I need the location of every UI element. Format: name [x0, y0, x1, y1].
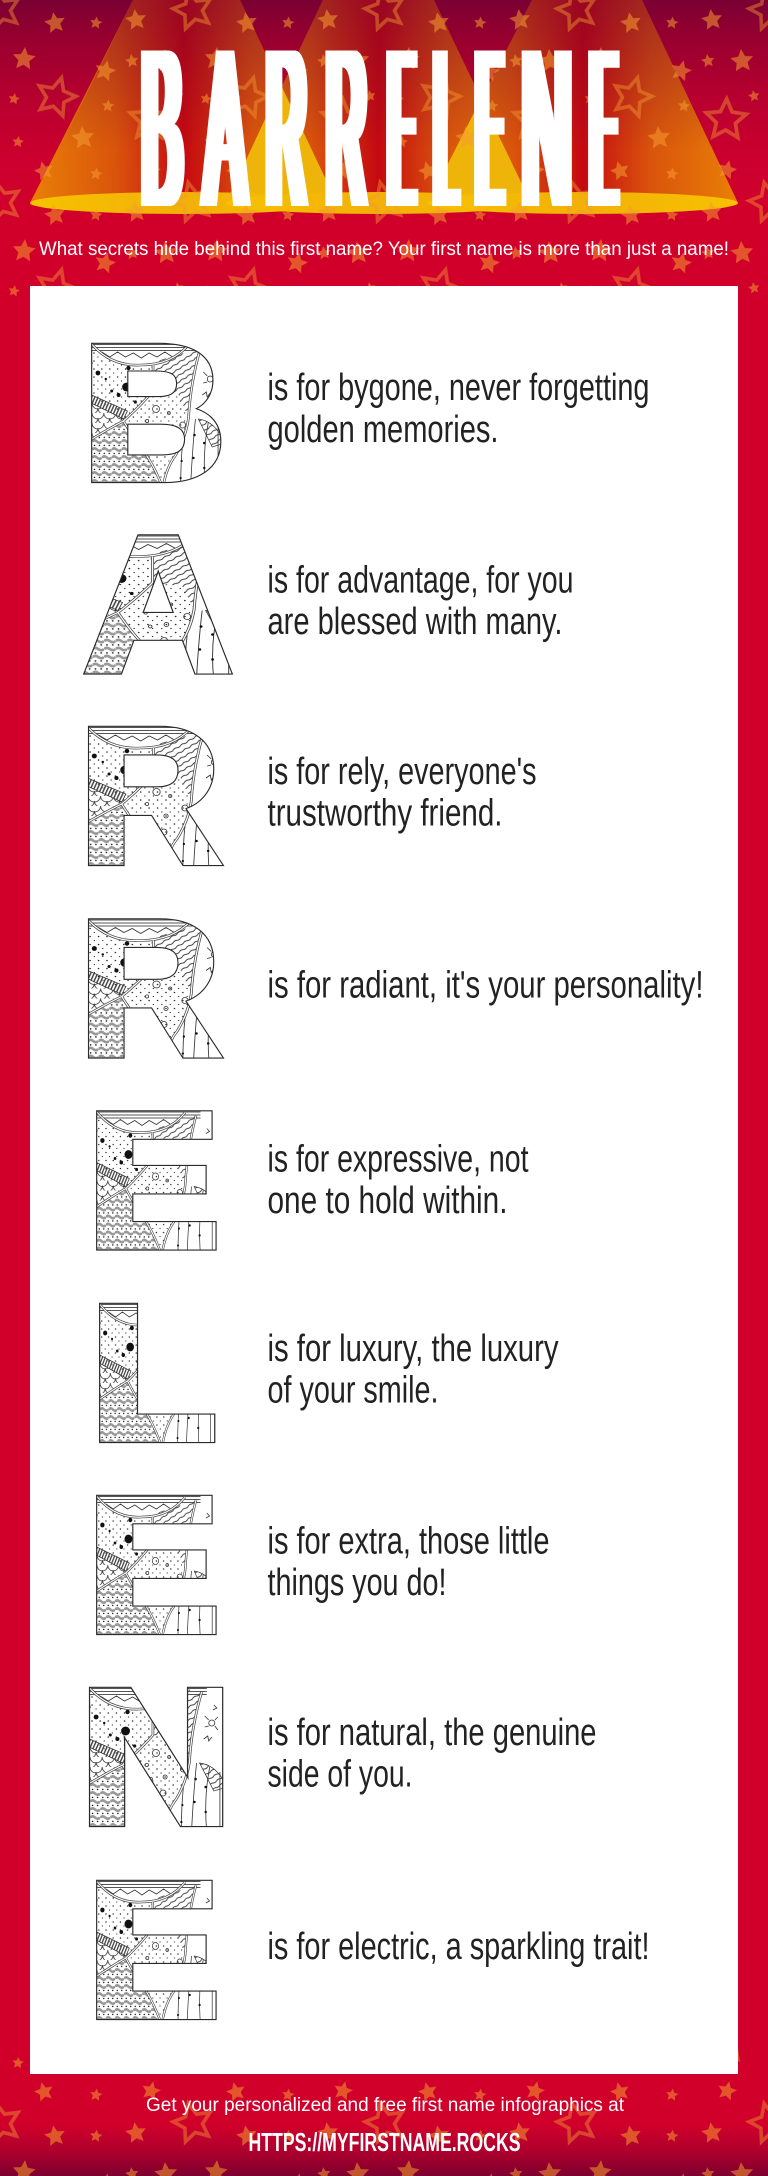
icon: doodle letter L [99, 1302, 216, 1444]
text: L line [268, 1328, 558, 1412]
icon: doodle letter A [82, 534, 234, 675]
icon: doodle letter R: R [79, 689, 221, 904]
icon: doodle letter E: E [87, 1843, 220, 2057]
title: A [205, 1, 245, 254]
title: L [435, 1, 456, 254]
icon: doodle letter E [96, 1880, 217, 2020]
icon: doodle letter E: E [87, 1458, 220, 1672]
subtitle: What secrets hide behind this first name? Your first name is more than just a name! [39, 238, 729, 260]
row: letter R [79, 882, 704, 1096]
text: A line [268, 559, 574, 643]
title: E [591, 1, 616, 254]
icon: doodle letter B [91, 342, 222, 484]
row: letter R [79, 689, 536, 904]
text: R line: is for rely, everyone's [268, 751, 536, 793]
spotlight cones [30, 0, 738, 214]
text: R line: trustworthy friend. [268, 792, 502, 834]
row: letter E [87, 1073, 529, 1288]
text: B line: is for bygone, never forgetting [268, 367, 650, 409]
row: letter B [82, 306, 650, 520]
footer url: HTTPS://MYFIRSTNAME.ROCKS [248, 2127, 520, 2157]
title: R [327, 1, 365, 254]
text: E line [268, 1138, 529, 1222]
text: E line: one to hold within. [268, 1180, 508, 1222]
text: N line [268, 1712, 596, 1796]
title [140, 1, 620, 254]
icon: doodle letter R [88, 918, 224, 1059]
text: E line: is for expressive, not [268, 1138, 529, 1180]
footer star pattern [0, 2045, 768, 2176]
icon: doodle letter A: A [84, 498, 232, 712]
icon: doodle letter E [96, 1494, 217, 1636]
icon: doodle letter N: N [79, 1649, 233, 1864]
icon: doodle letter L: L [90, 1265, 217, 1480]
text: N line: side of you. [268, 1754, 412, 1796]
text: E line: things you do! [268, 1562, 446, 1604]
icon: doodle letter B: B [82, 306, 226, 520]
title: E [477, 1, 502, 254]
text: A line: are blessed with many. [268, 601, 562, 643]
text: E line [268, 1520, 550, 1604]
row: letter N [79, 1649, 596, 1864]
footer line: Get your personalized and free first name infographics at [146, 2094, 625, 2116]
row: letter E [87, 1458, 550, 1672]
text: R line [268, 751, 536, 834]
icon: doodle letter E [96, 1110, 217, 1251]
icon: doodle letter R [88, 726, 224, 866]
title: R [267, 1, 305, 254]
text: N line: is for natural, the genuine [268, 1712, 596, 1754]
header star pattern [0, 0, 768, 300]
icon: doodle letter N [88, 1686, 224, 1828]
text: E line: is for extra, those little [268, 1520, 550, 1562]
title: E [389, 1, 414, 254]
title: N [522, 1, 571, 254]
text: B line: golden memories. [268, 409, 498, 451]
text: B line [268, 367, 650, 451]
white content panel [30, 286, 738, 2074]
text: L line: is for luxury, the luxury [268, 1328, 558, 1370]
row: letter L [90, 1265, 558, 1480]
icon: doodle letter R: R [79, 882, 221, 1096]
text: L line: of your smile. [268, 1370, 438, 1412]
text: E line: is for electric, a sparkling trait! [268, 1926, 650, 1968]
text: A line: is for advantage, for you [268, 559, 574, 601]
icon: doodle letter E: E [87, 1073, 220, 1288]
row: letter A [75, 498, 574, 712]
title: B [142, 1, 182, 254]
row: letter E [96, 1880, 647, 2020]
